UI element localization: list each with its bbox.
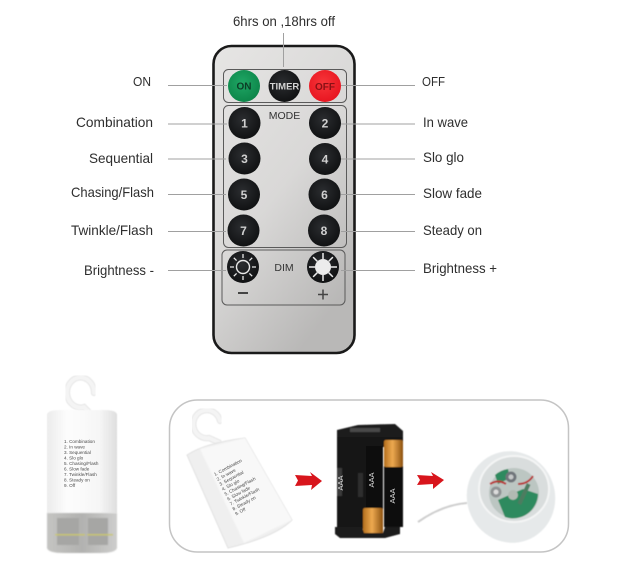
button: TIMER	[268, 70, 300, 102]
mode list: 5. Chasing/Flash	[224, 476, 257, 497]
button: 8	[308, 214, 340, 246]
step 2: AAA battery holder	[335, 424, 403, 538]
label: Combination: Combination	[76, 114, 153, 130]
label: OFF: OFF	[422, 74, 445, 89]
mode list: 7. Twinkle/Flash	[64, 472, 97, 477]
mode list: 5. Chasing/Flash	[64, 461, 99, 466]
step 3: LED light module	[418, 439, 568, 555]
panel: installation steps	[170, 400, 568, 552]
button: 5	[228, 178, 260, 210]
label: Chasing/Flash: Chasing/Flash	[71, 184, 154, 200]
DIM text: DIM	[274, 262, 294, 274]
button: 2	[309, 107, 341, 139]
button: ON: ON	[236, 82, 252, 92]
mode list: 1. Combination	[213, 458, 243, 477]
mode list: 6. Slow fade	[64, 466, 90, 472]
label: Slo glo: Slo glo	[423, 149, 464, 165]
case body	[47, 410, 117, 513]
mode list: 3. Sequential	[64, 450, 91, 455]
translucent base	[47, 513, 117, 553]
button: 1	[228, 107, 260, 139]
mode list: 9. Off	[64, 483, 76, 488]
minus sign	[238, 292, 248, 294]
mode list: 7. Twinkle/Flash	[229, 487, 261, 507]
switches and LEDs	[506, 472, 516, 482]
holder body	[337, 437, 369, 529]
label: ON: ON	[133, 74, 151, 89]
label: Steady on: Steady on	[423, 222, 482, 238]
button: 6	[308, 178, 340, 210]
holder base	[335, 527, 400, 538]
AAA markings	[336, 472, 397, 504]
plus sign	[318, 290, 328, 300]
button: ON	[228, 70, 260, 102]
mode list	[64, 439, 99, 488]
inner lens	[479, 456, 549, 522]
button: OFF	[309, 70, 341, 102]
mode list: 6. Slow fade	[226, 485, 251, 502]
button: dim up sun icon	[307, 251, 339, 283]
mode list: 1. Combination	[64, 439, 95, 444]
heading: timer label: 6hrs on ,18hrs off	[233, 13, 335, 29]
AAA markings: AAA	[388, 488, 397, 504]
label: Brightness minus: Brightness -	[84, 262, 154, 278]
arrow: step 1 to 2	[295, 472, 322, 490]
mode list: 8. Steady on	[64, 478, 90, 482]
label: In wave: In wave	[423, 114, 468, 130]
leader lines	[168, 33, 415, 270]
mode button group outline	[224, 106, 346, 248]
button: 3	[228, 142, 260, 174]
mode list: 2. In wave	[216, 467, 237, 482]
arrow: step 2 to 3	[417, 472, 444, 489]
mode list: 8. Steady on	[232, 495, 257, 511]
button: 7	[228, 214, 260, 246]
button: TIMER: TIMER	[270, 82, 299, 92]
button: OFF: OFF	[315, 82, 335, 93]
battery right	[384, 440, 403, 527]
product: hanging battery case	[47, 378, 117, 553]
top button group outline	[224, 70, 346, 102]
AAA markings: AAA	[336, 475, 345, 491]
label: Twinkle/Flash: Twinkle/Flash	[71, 222, 153, 238]
remote control	[214, 46, 354, 353]
button: 3: 3	[241, 152, 248, 166]
button: 4: 4	[322, 152, 329, 166]
button: 1: 1	[241, 116, 248, 130]
hook	[67, 378, 94, 411]
button: 8: 8	[321, 224, 328, 238]
wire	[418, 503, 467, 522]
MODE text: MODE	[269, 110, 300, 122]
mode list: 2. In wave	[64, 444, 85, 450]
red wires	[490, 476, 533, 484]
mode list: 9. Off	[234, 506, 247, 516]
mode list	[213, 456, 267, 516]
case body	[187, 438, 292, 548]
side notches	[337, 468, 342, 496]
AAA markings: AAA	[367, 472, 376, 488]
circuit board	[489, 468, 539, 518]
button: 6: 6	[321, 188, 328, 202]
button: 5: 5	[241, 188, 248, 202]
button: 2: 2	[322, 116, 329, 130]
step 1: tilted battery case	[187, 410, 292, 548]
mode list: 4. Slo glo	[221, 478, 241, 492]
mode list: 4. Slo glo	[64, 456, 84, 460]
battery front left	[363, 446, 383, 534]
label: Brightness plus: Brightness +	[423, 260, 497, 276]
label: Slow fade: Slow fade	[423, 185, 482, 201]
holder top	[337, 424, 403, 439]
case highlight	[200, 438, 292, 543]
button: 7: 7	[240, 224, 247, 238]
mode list: 3. Sequential	[218, 470, 244, 487]
button: dim down sun icon	[227, 251, 259, 283]
outer shell	[454, 439, 568, 555]
label: Sequential: Sequential	[89, 150, 153, 166]
hook	[193, 410, 220, 443]
button: 4	[309, 143, 341, 175]
dim button group outline	[222, 250, 345, 305]
